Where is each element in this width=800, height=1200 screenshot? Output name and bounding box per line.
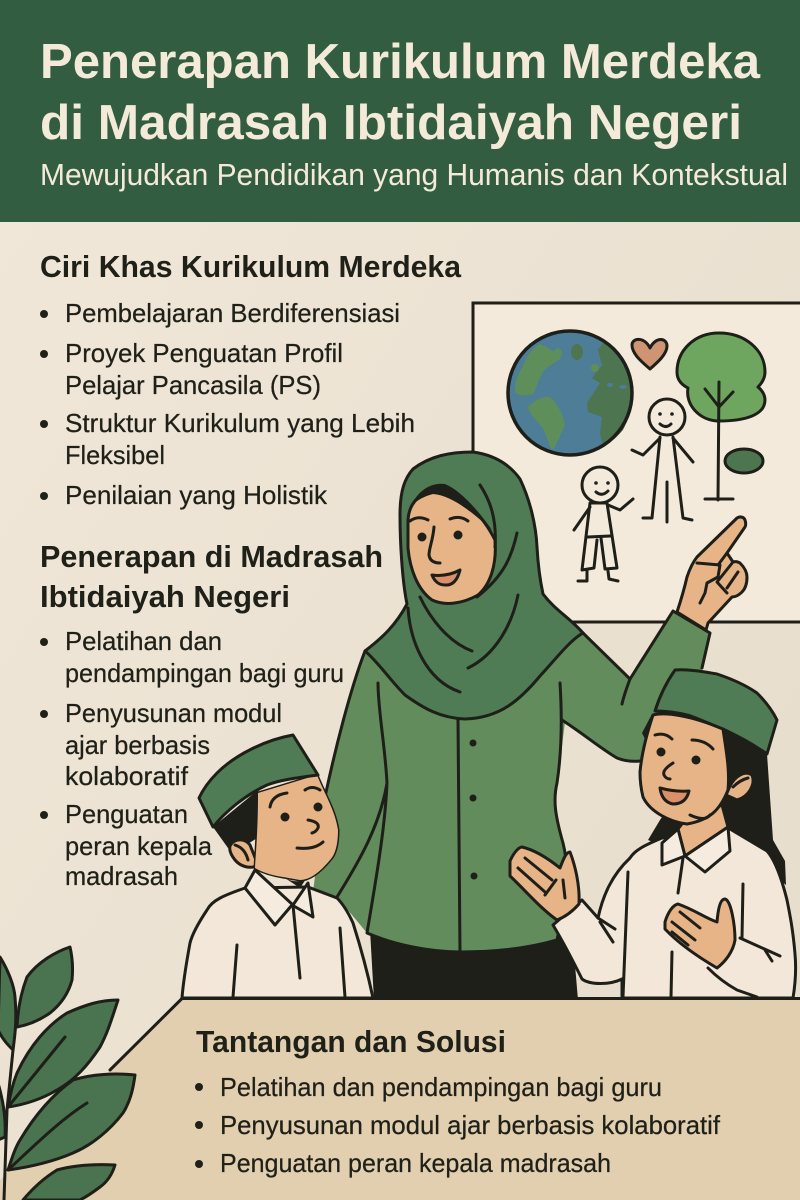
list: penerapan items: pendampingan bagi guru bbox=[65, 658, 344, 688]
list: penerapan items: Penguatan bbox=[65, 799, 188, 829]
boy facial features bbox=[235, 788, 323, 888]
girl cap bbox=[655, 670, 777, 754]
heading: penerapan: Ibtidaiyah Negeri bbox=[40, 580, 290, 614]
list: penerapan items: Penyusunan modul bbox=[65, 698, 282, 728]
list: penerapan items: ajar berbasis bbox=[65, 730, 210, 760]
heading: ciri khas: Ciri Khas Kurikulum Merdeka bbox=[40, 250, 462, 284]
title bbox=[40, 35, 761, 150]
girl shirt lines bbox=[598, 858, 780, 997]
list: tantangan items: Penguatan peran kepala madrasah bbox=[220, 1148, 611, 1178]
list: penerapan items: kolaboratif bbox=[65, 761, 189, 791]
girl hand left bbox=[510, 847, 579, 920]
list: ciri khas items: Pembelajaran Berdiferensiasi bbox=[65, 298, 400, 328]
list: ciri khas items: Struktur Kurikulum yang Lebih bbox=[65, 408, 415, 438]
girl face bbox=[640, 714, 753, 824]
list: ciri khas items: Fleksibel bbox=[65, 440, 165, 470]
icon: heart bbox=[632, 339, 667, 369]
icon: stick figure adult bbox=[632, 399, 693, 522]
list: tantangan items bbox=[195, 1072, 721, 1178]
subtitle: Mewujudkan Pendidikan yang Humanis dan Kontekstual bbox=[40, 157, 788, 192]
list: ciri khas items bbox=[40, 298, 415, 510]
boy cap bbox=[199, 735, 318, 827]
illustration: girl student bbox=[510, 670, 796, 998]
icon: globe bbox=[508, 331, 632, 455]
heading: tantangan: Tantangan dan Solusi bbox=[196, 1025, 506, 1059]
classroom board bbox=[473, 303, 800, 622]
girl collar bbox=[662, 827, 730, 872]
girl hand right bbox=[665, 899, 735, 968]
icon: stick figure child bbox=[574, 467, 633, 581]
list: ciri khas items: Penilaian yang Holistik bbox=[65, 480, 328, 510]
list: penerapan items: madrasah bbox=[65, 861, 178, 891]
hijab folds bbox=[408, 485, 518, 692]
boy face bbox=[255, 775, 338, 880]
teacher hijab bbox=[365, 452, 583, 719]
list: ciri khas items: Pelajar Pancasila (PS) bbox=[65, 370, 321, 400]
text block: ciri khas bbox=[40, 250, 462, 510]
icon: tree bbox=[677, 333, 765, 500]
blouse details bbox=[458, 679, 630, 952]
girl shirt bbox=[553, 829, 796, 998]
icon: bush bbox=[725, 449, 763, 473]
list: penerapan items: peran kepala bbox=[65, 831, 213, 861]
list: tantangan items: Pelatihan dan pendampingan bagi guru bbox=[220, 1072, 662, 1102]
teacher blouse and sleeves bbox=[312, 600, 710, 952]
illustration: teacher bbox=[312, 452, 747, 1000]
icon: plant bbox=[0, 947, 135, 1200]
header band bbox=[0, 0, 800, 222]
heading: penerapan bbox=[40, 540, 383, 614]
teacher trousers bbox=[370, 930, 578, 1000]
illustration: boy student bbox=[182, 735, 373, 998]
list: penerapan items: Pelatihan dan bbox=[65, 626, 222, 656]
boy hair bbox=[213, 790, 262, 852]
list: ciri khas items: Proyek Penguatan Profil bbox=[65, 338, 343, 368]
title: di Madrasah Ibtidaiyah Negeri bbox=[40, 96, 742, 150]
boy shirt bbox=[182, 887, 373, 998]
heading: penerapan: Penerapan di Madrasah bbox=[40, 540, 383, 574]
list: tantangan items: Penyusunan modul ajar berbasis kolaboratif bbox=[220, 1110, 721, 1140]
panel: tantangan dan solusi bbox=[0, 998, 800, 1200]
boy ear bbox=[230, 840, 258, 867]
list: penerapan items bbox=[40, 626, 344, 891]
teacher face bbox=[408, 484, 495, 603]
boy collar bbox=[245, 870, 313, 925]
girl hair bbox=[642, 714, 786, 885]
girl neck bbox=[678, 805, 728, 856]
teacher pointing hand bbox=[677, 517, 747, 630]
boy shirt lines bbox=[233, 905, 345, 997]
title: Penerapan Kurikulum Merdeka bbox=[40, 35, 761, 89]
text block: penerapan bbox=[40, 540, 383, 891]
